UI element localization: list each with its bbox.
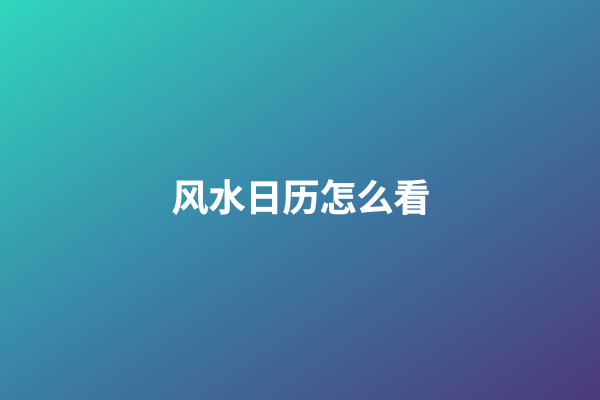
- title: 风水日历怎么看: [172, 178, 430, 219]
